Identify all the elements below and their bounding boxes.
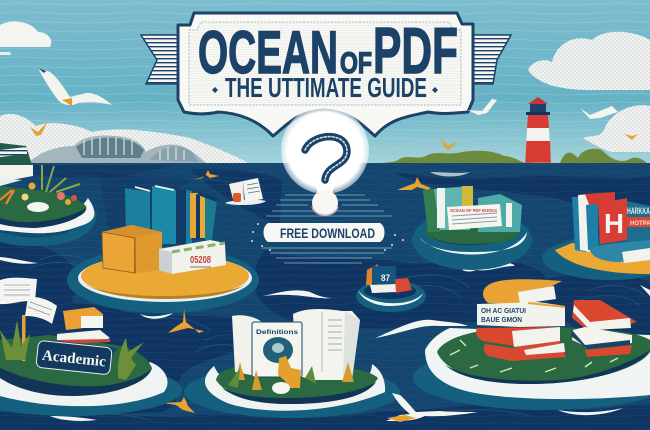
cat and flora <box>228 356 354 394</box>
subheading ornaments <box>212 87 438 93</box>
grass tufts <box>0 320 144 380</box>
bird: orange right <box>624 134 638 140</box>
island: academic <box>0 278 182 416</box>
bird: small orange left <box>30 121 48 136</box>
lighthouse <box>525 97 551 165</box>
plaque <box>178 13 473 136</box>
island: small book raft <box>356 264 426 312</box>
books and box stack <box>50 307 118 356</box>
right clouds <box>528 32 650 152</box>
ocean <box>0 163 650 430</box>
upright blue books <box>125 186 217 244</box>
dark water swathes <box>0 165 650 430</box>
free download pill <box>264 223 384 242</box>
academic label <box>36 340 112 375</box>
stacked books at shore <box>0 143 33 186</box>
heading ocean of pdf: OCEAN <box>198 19 338 86</box>
bird: orange over shore <box>440 137 458 150</box>
book pile left: BAUE GMON <box>481 317 522 324</box>
book pile left <box>476 279 566 361</box>
flags on pole <box>0 278 57 361</box>
heading ocean of pdf: PDF <box>373 14 458 87</box>
seagull: large upper left <box>38 68 112 106</box>
free download pill: FREE DOWNLOAD <box>280 226 375 241</box>
white parcel: 05208 <box>190 255 211 266</box>
flowers and grass <box>0 165 80 212</box>
spray dots around pill <box>251 223 404 251</box>
academic label: Academic <box>41 348 107 370</box>
island: big right with book piles <box>413 279 650 410</box>
white parcel <box>159 240 226 274</box>
gull: upper right <box>468 99 497 115</box>
gull: right sky <box>580 106 618 119</box>
swirl lines <box>30 180 645 420</box>
title banner <box>141 13 511 136</box>
upright book group: H <box>604 208 624 239</box>
island: upper right with green book <box>412 186 532 270</box>
seagull: bottom water <box>386 393 478 422</box>
sky background <box>0 0 650 165</box>
lying blue book <box>590 240 650 263</box>
upright book group <box>572 192 650 252</box>
island: upper left garden <box>0 143 97 246</box>
book pile left: OH AC GIATUI <box>481 306 526 315</box>
book pile right <box>571 300 637 357</box>
front cover card: Definitions <box>256 329 298 336</box>
distant stadium <box>28 135 206 163</box>
ribbon ends <box>141 35 511 84</box>
centre reflection streaks <box>262 195 392 263</box>
island: small book raft: 87 <box>381 273 390 283</box>
question mark <box>305 137 347 180</box>
left clouds <box>0 21 248 163</box>
island: sand with boxes and books <box>67 186 259 313</box>
question speech bubble <box>281 106 369 216</box>
upright book group: HOTPA <box>630 221 650 227</box>
white wave crests <box>0 172 650 421</box>
far shore land <box>370 149 650 176</box>
island: right sand with red books <box>542 192 650 280</box>
book pages <box>232 309 360 380</box>
subheading: THE UTTIMATE GUIDE <box>225 72 427 103</box>
island: tiny floating leaflet <box>225 178 266 205</box>
heading ocean of pdf: OF <box>340 47 372 80</box>
open green book <box>423 186 522 232</box>
island: open book <box>184 309 400 418</box>
orange box <box>102 225 162 273</box>
bird foot marks on water <box>163 170 431 413</box>
grass dashes <box>450 340 618 372</box>
paper sheet: OCEAN OF PDF BOOKS <box>450 208 497 213</box>
front cover card <box>252 322 302 377</box>
